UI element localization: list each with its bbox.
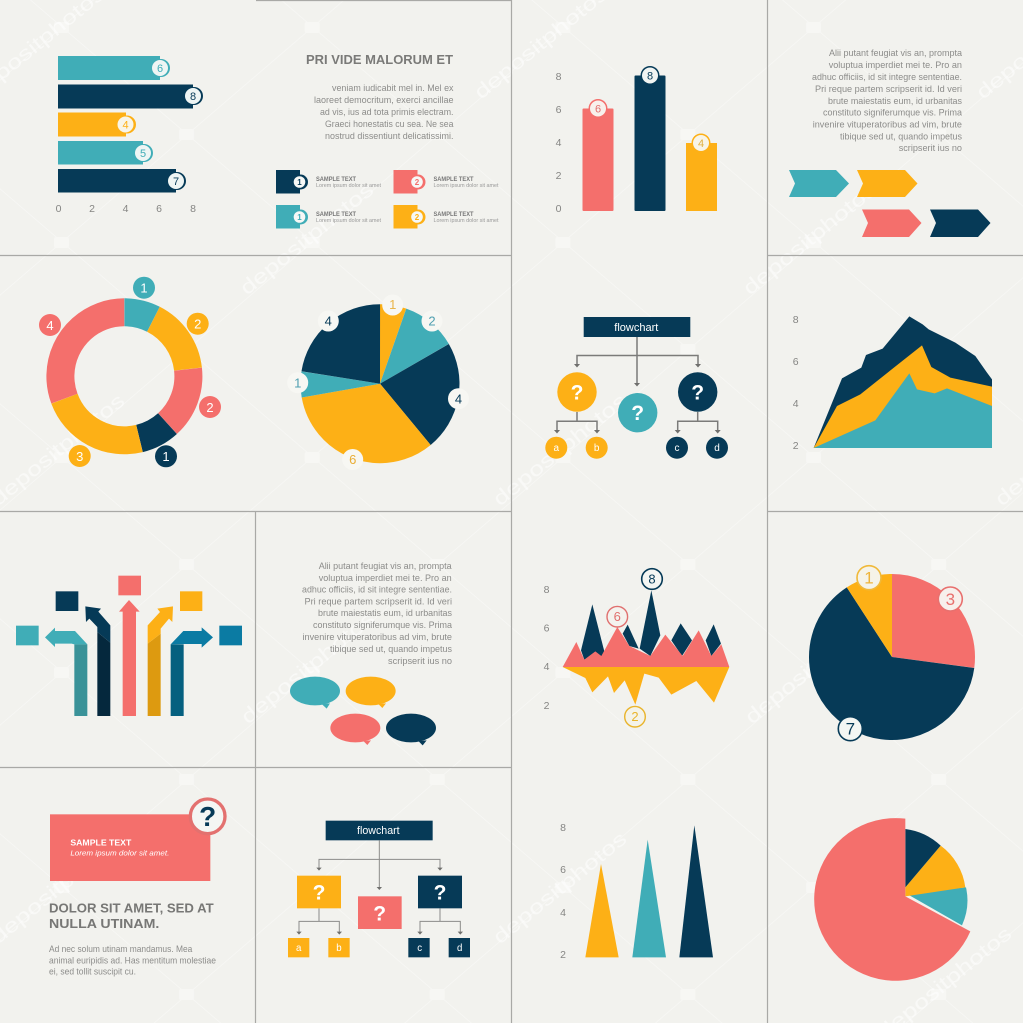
body text: laoreet democritum, exerci ancillae	[314, 95, 454, 106]
donut badges	[39, 277, 221, 467]
connectors	[296, 840, 463, 935]
panel: heading, text and legend	[276, 52, 499, 228]
donut badges: 2	[194, 316, 201, 332]
body text: veniam iudicabit mel in. Mel ex	[332, 83, 454, 94]
pink bar	[582, 99, 614, 211]
pie notches and labels: 4	[325, 314, 332, 328]
y axis labels	[544, 584, 550, 712]
y axis labels: 6	[544, 622, 550, 634]
banner text: Lorem ipsum dolor sit amet.	[70, 848, 169, 857]
pie notches and labels: 2	[428, 314, 436, 328]
y axis labels: 8	[556, 71, 562, 83]
x axis labels	[56, 203, 196, 215]
watermark: depositphotos	[237, 608, 379, 729]
legend item pink: Lorem ipsum dolor sit amet	[434, 183, 499, 189]
body text: Alii putant feugiat vis an, prompta	[319, 561, 452, 572]
slices	[835, 600, 949, 714]
leaf boxes	[288, 938, 470, 957]
question badge	[190, 799, 225, 834]
body text: constituto signiferumque vis. Prima	[823, 108, 963, 118]
arrow navy	[85, 606, 110, 716]
y axis labels: 4	[560, 907, 566, 919]
panel: exploded pie	[814, 818, 970, 981]
body text: adhuc officiis, id sit integre sententiae.	[302, 584, 452, 596]
panel: text and speech bubbles	[290, 561, 453, 745]
chevron teal	[789, 170, 849, 197]
legend item yellow: Lorem ipsum dolor sit amet	[434, 218, 499, 224]
legend item navy: SAMPLE TEXT	[316, 176, 356, 183]
donut badges: 1	[140, 280, 148, 296]
legend item yellow: SAMPLE TEXT	[434, 211, 474, 218]
donut badges: 4	[46, 318, 54, 333]
bar 7: 7	[173, 176, 179, 188]
yellow slice	[905, 846, 965, 896]
yellow bar: 4	[698, 138, 704, 150]
body text: Pri reque partem scripserit id. Id veri	[304, 596, 452, 608]
panel: donut chart	[34, 277, 221, 467]
badge 2: 2	[631, 709, 639, 724]
badges: 3	[946, 590, 955, 609]
legend item pink: SAMPLE TEXT	[434, 176, 474, 183]
question boxes: ?	[434, 882, 446, 905]
pie notches and labels: 1	[294, 376, 301, 390]
body text: adhuc officiis, id sit integre sententiae.	[812, 72, 962, 83]
body text: animal euripidis ad. Has mentitum molestiae	[49, 956, 216, 967]
heading: DOLOR SIT AMET, SED AT	[49, 901, 214, 916]
x axis labels: 2	[89, 203, 95, 215]
pie notches and labels	[287, 294, 469, 470]
y axis labels: 8	[793, 314, 799, 326]
body text: scripserit ius no	[388, 656, 452, 667]
badge 6: 6	[614, 609, 621, 624]
heading: PRI VIDE MALORUM ET	[306, 52, 453, 67]
pie notches and labels: 1	[389, 297, 396, 312]
watermark: depositphotos	[489, 390, 631, 511]
y axis labels: 2	[793, 440, 799, 452]
flowchart title box: flowchart	[614, 322, 658, 334]
y axis labels: 6	[793, 356, 799, 368]
pie segments	[324, 328, 436, 440]
panel: spiky mirrored chart	[544, 569, 729, 727]
pink bar: 6	[595, 104, 601, 116]
donut badges: 1	[162, 449, 170, 464]
y axis labels: 2	[560, 949, 566, 961]
question circles: ?	[691, 382, 704, 404]
flowchart title box	[584, 317, 690, 337]
chevron navy	[930, 210, 990, 237]
body text: invenire vituperatoribus ad vim, brute	[302, 632, 452, 643]
donut segments	[34, 286, 215, 467]
panel: triangle chart	[560, 822, 713, 961]
panel: vertical bar chart	[556, 66, 717, 215]
body text: brute maiestatis eum, id urbanitas	[318, 608, 452, 619]
flowchart title box	[326, 821, 433, 840]
speech bubbles	[290, 677, 436, 745]
y axis labels: 0	[556, 203, 562, 215]
bar 5	[58, 141, 153, 164]
y axis labels	[560, 822, 566, 961]
panel: sample text callout	[49, 799, 225, 978]
navy bar	[634, 66, 666, 211]
pink slice	[814, 818, 970, 981]
y axis labels: 6	[560, 864, 566, 876]
bar 4	[58, 112, 136, 136]
arrow yellow	[148, 606, 173, 716]
leaf circles: c	[674, 443, 680, 454]
body text: Ad nec solum utinam mandamus. Mea	[49, 944, 193, 955]
pink banner	[50, 814, 210, 881]
body text: voluptua imperdiet mei te. Pro an	[319, 573, 452, 584]
panel: three-slice pie	[835, 566, 962, 741]
arrow blue	[171, 627, 213, 716]
legend item navy: 1	[297, 178, 302, 187]
body text: constituto signiferumque vis. Prima	[313, 620, 453, 631]
y axis labels: 2	[544, 700, 550, 712]
connectors	[554, 337, 721, 434]
legend item navy	[276, 170, 381, 194]
y axis labels: 4	[556, 137, 562, 149]
badge 8	[642, 569, 662, 589]
leaf circles: a	[554, 443, 560, 454]
body text: nostrud dissentiunt delicatissimi.	[325, 131, 454, 142]
y axis labels: 8	[560, 822, 566, 834]
banner text	[70, 838, 169, 857]
question circles	[557, 372, 717, 432]
leaf circles	[545, 437, 728, 459]
y axis labels	[793, 314, 799, 452]
leaf circles: b	[594, 443, 600, 454]
body text: tibique sed ut, quando impetus	[840, 132, 962, 142]
body text: scripserit ius no	[899, 143, 962, 154]
panel: area chart	[793, 314, 992, 452]
donut badges: 3	[76, 449, 83, 464]
flowchart title box: flowchart	[357, 825, 400, 837]
badge 6	[607, 606, 628, 627]
bar 6: 6	[157, 63, 163, 75]
legend item teal: Lorem ipsum dolor sit amet	[316, 218, 381, 224]
bar 4: 4	[122, 120, 129, 132]
leaf boxes: a	[296, 943, 302, 954]
body text: Pri reque partem scripserit id. Id veri	[815, 84, 962, 95]
badge 2	[625, 706, 645, 727]
x axis labels: 8	[190, 203, 196, 215]
watermark: depositphotos	[741, 608, 883, 729]
bar 5: 5	[140, 148, 146, 160]
body text: brute maiestatis eum, id urbanitas	[828, 96, 962, 107]
bar 8: 8	[190, 91, 196, 103]
watermark: depositphotos	[470, 0, 612, 104]
badges: 1	[864, 569, 874, 588]
triangles	[585, 825, 713, 957]
body text	[302, 561, 453, 667]
legend item yellow	[394, 205, 499, 228]
body text	[812, 48, 963, 154]
watermark: depositphotos	[739, 179, 881, 300]
badges	[838, 566, 962, 741]
y axis labels: 8	[544, 584, 550, 596]
stacked areas	[814, 316, 992, 448]
panel: square flowchart	[288, 821, 470, 957]
body text	[314, 83, 454, 142]
question badge: ?	[199, 801, 216, 832]
leaf circles: d	[714, 443, 720, 454]
body text: voluptua imperdiet mei te. Pro an	[829, 60, 962, 71]
heading	[49, 901, 214, 931]
legend item teal: 1	[297, 213, 302, 222]
bar 6	[58, 56, 170, 80]
leaf boxes: c	[417, 943, 422, 954]
legend item pink: 2	[415, 178, 420, 187]
panel: circular flowchart	[545, 317, 728, 459]
heading: NULLA UTINAM.	[49, 916, 159, 931]
chevron pink	[862, 210, 922, 237]
chevron yellow	[857, 170, 918, 197]
banner text: SAMPLE TEXT	[70, 838, 132, 848]
question boxes: ?	[313, 882, 325, 905]
y axis labels: 2	[556, 170, 562, 182]
target squares	[16, 576, 242, 645]
bar 8	[58, 84, 203, 108]
y axis labels: 4	[793, 398, 799, 410]
watermark: depositphotos	[489, 828, 631, 949]
y axis labels	[556, 71, 562, 215]
x axis labels: 4	[123, 203, 129, 215]
panel: horizontal bar chart	[56, 56, 203, 215]
legend item yellow: 2	[415, 213, 420, 222]
body text: invenire vituperatoribus ad vim, brute	[813, 120, 962, 130]
panel: notched pie chart	[287, 294, 469, 470]
body text	[49, 944, 216, 978]
body text: Alii putant feugiat vis an, prompta	[829, 48, 963, 59]
watermark: depositphotos	[236, 179, 378, 300]
arrow pink	[119, 600, 140, 716]
navy bar: 8	[647, 70, 653, 82]
panel: text and chevrons	[789, 48, 990, 237]
pie notches and labels: 6	[349, 452, 356, 467]
pie notches and labels: 4	[455, 392, 462, 406]
badges: 7	[846, 720, 855, 739]
badge 8: 8	[648, 572, 656, 586]
body text: ei, sed tollit suscipit cu.	[49, 967, 136, 978]
panel: direction arrows	[16, 576, 242, 716]
navy slice	[905, 829, 941, 887]
legend item teal	[276, 205, 381, 228]
legend item navy: Lorem ipsum dolor sit amet	[316, 183, 381, 189]
body text: tibique sed ut, quando impetus	[330, 644, 452, 655]
question circles: ?	[631, 402, 644, 425]
spikes	[563, 590, 729, 705]
bar 7	[58, 169, 186, 192]
arrow teal	[45, 628, 87, 716]
leaf boxes: b	[336, 943, 342, 954]
body text: ad vis, ius ad tota primis electram.	[320, 107, 454, 118]
question circles: ?	[571, 382, 583, 404]
x axis labels: 6	[156, 203, 162, 215]
yellow bar	[686, 134, 717, 211]
teal slice	[905, 887, 967, 925]
legend item teal: SAMPLE TEXT	[316, 211, 356, 218]
body text: Graeci honestatis cu sea. Ne sea	[325, 119, 454, 130]
question boxes	[297, 876, 462, 929]
question boxes: ?	[373, 902, 386, 925]
y axis labels: 4	[544, 661, 550, 673]
legend item pink	[394, 170, 499, 194]
donut badges: 2	[206, 400, 214, 415]
leaf boxes: d	[457, 943, 462, 954]
x axis labels: 0	[56, 203, 62, 215]
y axis labels: 6	[556, 104, 562, 116]
